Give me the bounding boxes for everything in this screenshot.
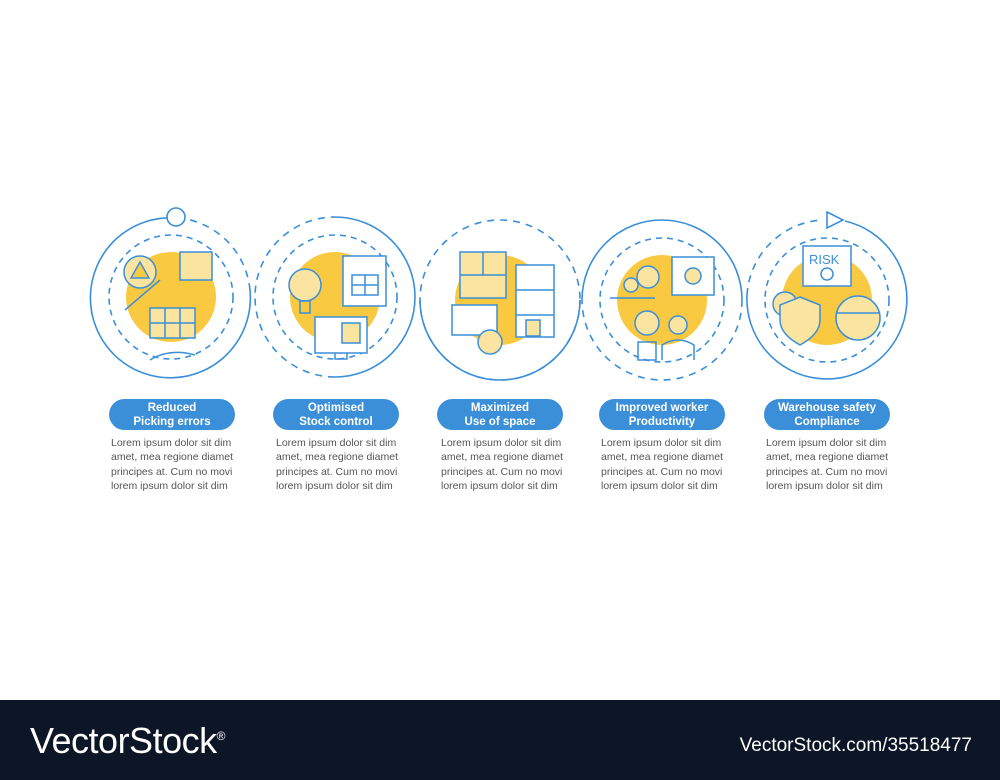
label 4 xyxy=(599,399,725,430)
image id: VectorStock.com/35518477 xyxy=(740,735,972,756)
logo: VectorStock® xyxy=(30,720,225,761)
circle 5: RISK xyxy=(809,252,840,267)
footer bar xyxy=(0,700,1000,780)
text 5: Lorem ipsum dolor sit dim amet, mea regione diamet principes at. Cum no movi lorem ipsum dolor sit dim xyxy=(766,437,888,492)
label 5: Warehouse safety xyxy=(778,402,876,414)
text 3: Lorem ipsum dolor sit dim amet, mea regione diamet principes at. Cum no movi lorem ipsum dolor sit dim xyxy=(441,437,563,492)
label 2: Optimised xyxy=(308,402,364,414)
label 3 xyxy=(437,399,563,430)
label 5: Compliance xyxy=(794,416,860,428)
circle 4 xyxy=(582,220,742,380)
label 5 xyxy=(764,399,890,430)
icon: rack boxes xyxy=(452,252,554,354)
label 1 xyxy=(109,399,235,430)
text 4: Lorem ipsum dolor sit dim amet, mea regione diamet principes at. Cum no movi lorem ipsum dolor sit dim xyxy=(601,437,723,492)
icon: risk monitor, shield, helmet gear xyxy=(773,246,880,345)
label 3: Use of space xyxy=(465,416,535,428)
circle 3 xyxy=(420,220,580,380)
icon: gears, monitor, worker xyxy=(610,257,714,360)
text 2: Lorem ipsum dolor sit dim amet, mea regione diamet principes at. Cum no movi lorem ipsum dolor sit dim xyxy=(276,437,398,492)
label 3: Maximized xyxy=(471,402,529,414)
icon: gear warning, boxes xyxy=(124,252,212,360)
label 4: Productivity xyxy=(629,416,695,428)
label 4: Improved worker xyxy=(616,402,708,414)
label 2: Stock control xyxy=(299,416,373,428)
icon: bulb, sheet, monitor xyxy=(289,256,386,359)
label 2 xyxy=(273,399,399,430)
circle 1 xyxy=(90,208,250,378)
label 1: Picking errors xyxy=(133,416,211,428)
text 1: Lorem ipsum dolor sit dim amet, mea regione diamet principes at. Cum no movi lorem ipsum dolor sit dim xyxy=(111,437,233,492)
label 1: Reduced xyxy=(148,402,196,414)
circle 2 xyxy=(255,217,415,377)
circle 5 xyxy=(747,212,907,379)
